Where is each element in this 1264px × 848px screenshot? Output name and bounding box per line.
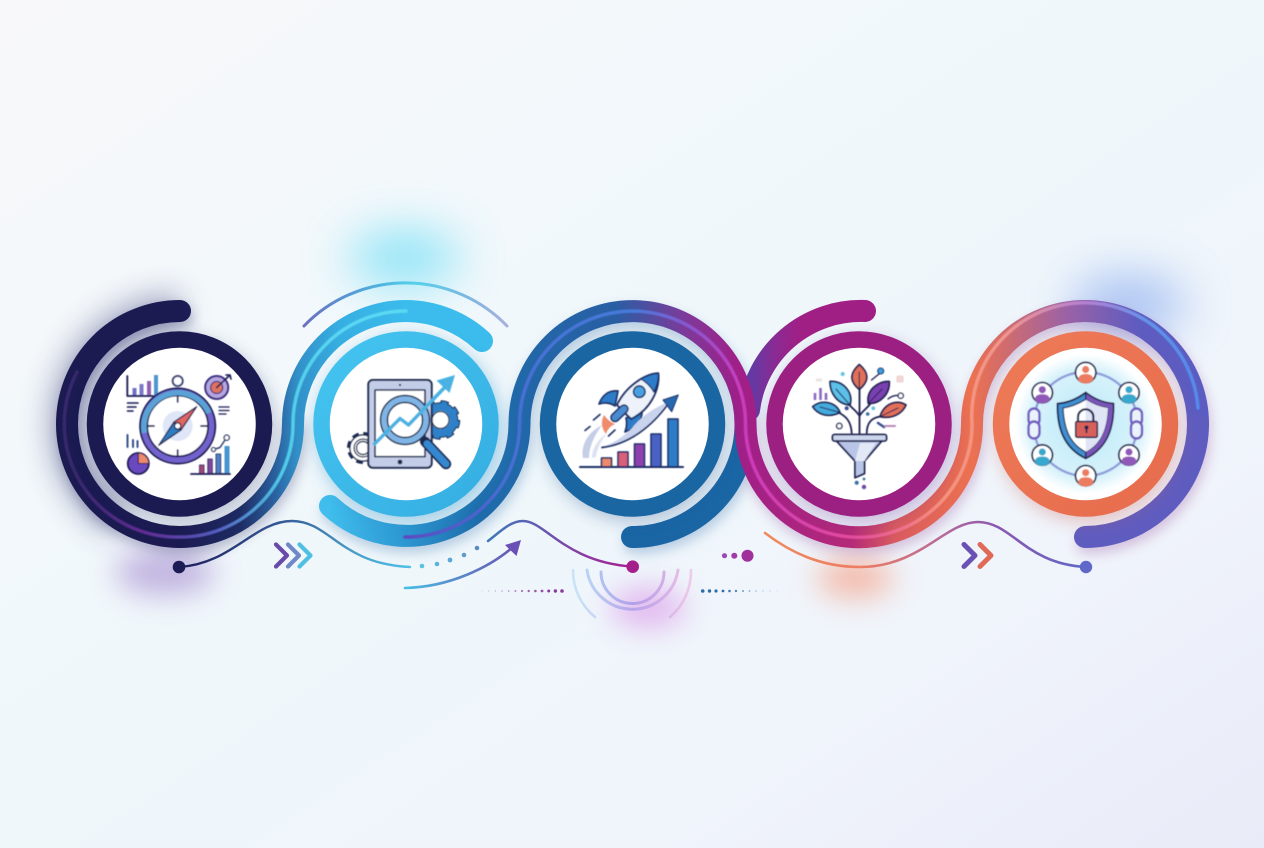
icon part: person lower left [1032,445,1053,466]
stage ring three [543,338,727,522]
icon: rocket and growth bars [580,373,683,467]
dotted line: left fading dots [482,589,564,593]
icon part: growth arrow [374,375,455,445]
icon part: target [205,375,231,399]
icon part: stems [838,388,880,434]
stage ring five [996,338,1180,522]
stage ring four [769,338,953,522]
icon part: small bars [128,435,138,447]
icon part: speed dashes [585,414,615,436]
connector: navy to cyan wave [173,521,410,573]
icon part: left gear [350,435,376,461]
icon part: bottom bars [191,435,230,474]
three dots [722,550,754,562]
connector: blue to magenta wave [488,521,639,573]
connector: orange to violet wave [765,522,1092,573]
ribbon: cyan through blue, magenta, orange [330,311,1198,537]
sonar arcs [573,570,691,617]
icon part: body [615,373,658,419]
icon part: network ring [1034,372,1138,476]
icon part: fins [599,391,642,432]
stage ring two [316,337,502,523]
icon part: person bottom [1076,466,1096,487]
ribbon shadows [69,317,1200,543]
ribbon highlight: blue through magenta, orange [405,303,1198,537]
dotted line: right fading dots [701,589,778,593]
arrow: rising curve [405,540,521,588]
icon part: right gear [425,404,456,436]
icon part: right chain [1131,408,1142,438]
ambient glows [67,232,1186,628]
icon part: lock [1076,409,1097,437]
icon part: list [219,407,229,414]
icon part: shield [1057,392,1114,458]
icon: compass with charts [127,375,231,474]
stage ring one [90,338,274,522]
ribbon: blue return under magenta [632,424,746,537]
dotted connector: rising dots [420,546,479,568]
icon part: person lower right [1119,445,1139,466]
icon part: magnifier [384,399,446,464]
icon part: leaves [813,364,906,417]
ribbon: navy to cyan [67,311,482,537]
icon part: person upper left [1032,382,1053,404]
ribbon highlight: navy to cyan [64,311,406,537]
icon part: compass [144,376,212,460]
icon: shield, lock and network [1016,354,1156,494]
ribbon end: violet [1085,424,1198,537]
icon part: tablet [368,380,432,468]
icon part: funnel [832,434,886,478]
arrow: double chevrons [964,544,991,566]
icon part: person upper right [1119,382,1139,404]
icon part: smoke trail [583,425,607,458]
icon part: bars [580,419,683,467]
arrow: triple chevrons [276,544,310,566]
icon part: glow [1016,354,1156,494]
icon part: trail arrow [602,395,678,448]
icon part: left chain [1028,408,1040,438]
icon part: small decorations [815,368,903,489]
ribbon: magenta top of stage four [749,311,865,410]
icon part: person top [1076,362,1096,384]
icon: funnel with leaves [813,364,906,489]
icon part: pie [128,453,149,474]
icon part: top bar chart [127,375,158,411]
icon part: flame [602,415,615,434]
icon: tablet, magnifier and gears [350,375,456,468]
thin arc above stage two [304,283,507,326]
